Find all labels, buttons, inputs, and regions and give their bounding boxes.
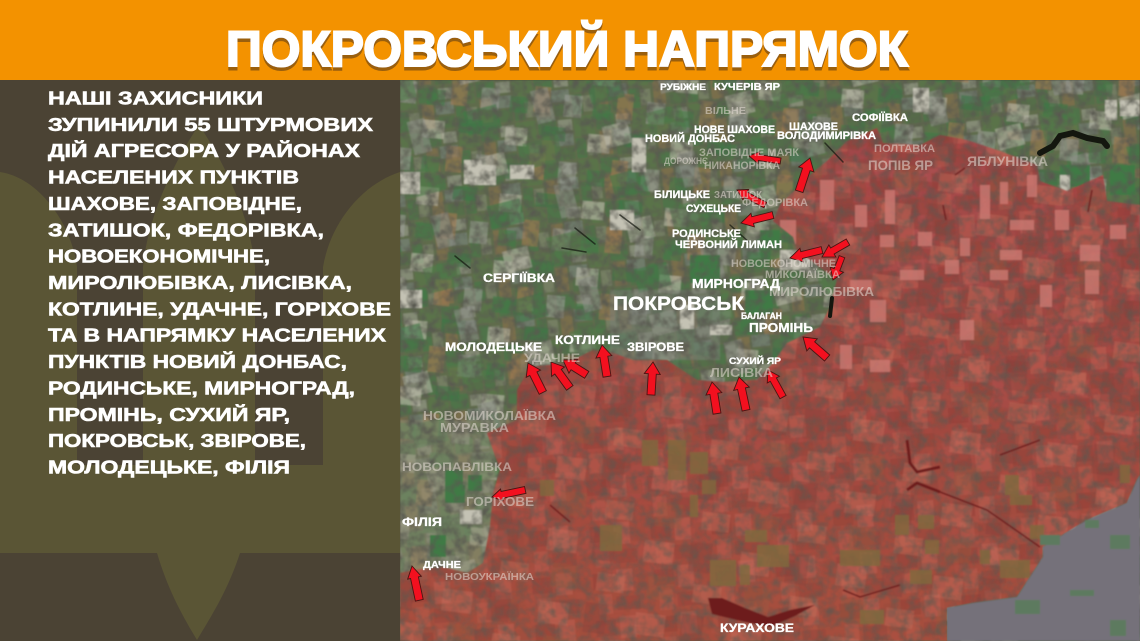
text block: defence summary: [48, 88, 391, 478]
map: black ponds: [455, 133, 1107, 316]
arrow: near Lysivka: [731, 375, 754, 412]
text block: defence summary: ДІЙ АГРЕСОРА У РАЙОНАХ: [48, 140, 360, 161]
map: white settlement labels: КУРАХОВЕ: [720, 621, 794, 635]
arrow: near Sukhyi Yar: [762, 367, 789, 401]
icon: trident watermark: [0, 125, 400, 640]
map: white settlement labels: СУХИЙ ЯР: [729, 355, 781, 366]
map: faded settlement labels: ГОРІХОВЕ: [466, 494, 534, 509]
arrow: near Udachne: [545, 357, 576, 393]
panel: left summary background: [0, 80, 400, 641]
map: white settlement labels: [402, 82, 908, 635]
arrow: near Zvirove: [643, 362, 661, 395]
text block: defence summary: КОТЛИНЕ, УДАЧНЕ, ГОРІХОВЕ: [48, 299, 391, 319]
arrow: near Lysivka west: [704, 381, 725, 415]
map: noise texture: [400, 80, 1140, 641]
arrow: near Novoekonomichne east: [818, 236, 851, 263]
map: white settlement labels: РУБІЖНЕ: [660, 82, 706, 92]
map: white settlement labels: НОВИЙ ДОНБАС: [645, 132, 735, 145]
map: faded settlement labels: НОВОМИКОЛАЇВКА: [423, 408, 557, 423]
arrow: near Shakhove: [792, 156, 818, 194]
text block: defence summary: ШАХОВЕ, ЗАПОВІДНЕ,: [48, 194, 302, 214]
text block: defence summary: ПРОМІНЬ, СУХИЙ ЯР,: [48, 404, 290, 425]
map: white settlement labels: ШАХОВЕ: [789, 121, 838, 133]
map: faded settlement labels: ДОРОЖНЄ: [664, 156, 709, 166]
map: faded settlement labels: НОВОУКРАЇНКА: [445, 570, 534, 583]
map: white settlement labels: КУЧЕРІВ ЯР: [714, 82, 780, 93]
map: occupied territory in red: [400, 120, 1140, 641]
map: white settlement labels: СУХЕЦЬКЕ: [686, 203, 741, 215]
map: faded settlement labels: МИРОЛЮБІВКА: [769, 284, 875, 299]
map: white settlement labels: ФІЛІЯ: [402, 515, 442, 529]
map: white settlement labels: РОДИНСЬКЕ: [672, 228, 741, 240]
map: green patches in city area: [1015, 520, 1130, 636]
map: white settlement labels: КОТЛИНЕ: [555, 333, 620, 347]
text block: defence summary: РОДИНСЬКЕ, МИРНОГРАД,: [48, 378, 355, 398]
map: faded settlement labels: МИКОЛАЇВКА: [765, 268, 840, 281]
arrow: near Dachne: [405, 565, 426, 602]
map: faded settlement labels: ЗАПОВІДНЕ МАЯК: [699, 147, 799, 159]
text block: defence summary: МОЛОДЕЦЬКЕ, ФІЛІЯ: [48, 458, 290, 478]
text block: defence summary: ТА В НАПРЯМКУ НАСЕЛЕНИХ: [48, 326, 386, 346]
map: rivers and reservoir in red zone: [550, 168, 1092, 627]
text block: defence summary: ЗАТИШОК, ФЕДОРІВКА,: [48, 220, 324, 240]
title: ПОКРОВСЬКИЙ НАПРЯМОК: [226, 20, 908, 77]
arrow: near Udachne east: [559, 353, 591, 382]
arrow: near Kotlyne: [594, 344, 615, 378]
map: faded settlement labels: НИКАНОРІВКА: [704, 160, 780, 172]
header bar: [0, 0, 1140, 80]
text block: defence summary: НОВОЕКОНОМІЧНЕ,: [48, 247, 270, 267]
map: satellite base: [400, 80, 1140, 641]
map: faded settlement labels: МУРАВКА: [440, 420, 510, 435]
map: white settlement labels: БІЛИЦЬКЕ: [654, 189, 710, 201]
map: faded settlement labels: ЯБЛУНІВКА: [967, 153, 1048, 169]
arrow: near Novoekonomichne: [788, 243, 824, 265]
text block: defence summary: МИРОЛЮБІВКА, ЛИСІВКА,: [48, 273, 352, 293]
map: faded settlement labels: ЛИСІВКА: [710, 365, 774, 380]
arrow: near Fedorivka: [739, 208, 775, 230]
map: white settlement labels: СЕРГІЇВКА: [483, 270, 555, 285]
text block: defence summary: ЗУПИНИЛИ 55 ШТУРМОВИХ: [48, 115, 373, 135]
map: faded settlement labels: НОВОПАВЛІВКА: [402, 460, 512, 474]
map: faded settlement labels: НОВОЕКОНОМІЧНЕ: [731, 258, 836, 270]
arrow: near Promin: [798, 331, 832, 364]
text block: defence summary: НАШІ ЗАХИСНИКИ: [48, 88, 263, 108]
map: white settlement labels: НОВЕ ШАХОВЕ: [694, 124, 775, 136]
arrow: near Zapovidne: [748, 150, 782, 167]
map: faded settlement labels: ПОПІВ ЯР: [868, 157, 933, 173]
map: Kurakhove city area: [947, 475, 1140, 641]
map: fields inside red zone: [400, 120, 1140, 641]
text block: defence summary: ПОКРОВСЬК, ЗВІРОВЕ,: [48, 431, 306, 451]
map: faded settlement labels: [402, 106, 1048, 583]
map: faded settlement labels: УДАЧНЕ: [524, 351, 580, 365]
map: white settlement labels: ЗВІРОВЕ: [627, 340, 684, 354]
map: white settlement labels: МОЛОДЕЦЬКЕ: [445, 340, 542, 354]
map: faded settlement labels: ПОЛТАВКА: [874, 143, 935, 155]
map: white settlement labels: СОФІЇВКА: [852, 111, 908, 124]
map: white settlement labels: ВОЛОДИМИРІВКА: [777, 130, 876, 142]
map: white settlement labels: ЧЕРВОНИЙ ЛИМАН: [675, 238, 782, 251]
text block: defence summary: ПУНКТІВ НОВИЙ ДОНБАС,: [48, 351, 347, 372]
map: faded settlement labels: ФЕДОРІВКА: [742, 197, 808, 209]
map: faded settlement labels: ЗАТИШОК: [714, 190, 763, 201]
map: white settlement labels: МИРНОГРАД: [692, 276, 781, 291]
map: front-line arrows: [405, 150, 851, 602]
map: white settlement labels: ДАЧНЕ: [423, 560, 461, 571]
map: white settlement labels: ПРОМІНЬ: [749, 320, 813, 335]
map: farm field mosaic: [400, 80, 1140, 641]
arrow: near Horikhove: [491, 484, 527, 503]
map: faded settlement labels: ВІЛЬНЕ: [705, 106, 746, 117]
text block: defence summary: НАСЕЛЕНИХ ПУНКТІВ: [48, 168, 299, 188]
map: white settlement labels: ПОКРОВСЬК: [613, 294, 744, 315]
arrow: near Myroliubivka: [826, 254, 848, 283]
arrow: near Zatyshok: [734, 185, 768, 210]
map: white settlement labels: БАЛАГАН: [741, 311, 782, 321]
arrow: near Molodetske: [521, 359, 550, 396]
